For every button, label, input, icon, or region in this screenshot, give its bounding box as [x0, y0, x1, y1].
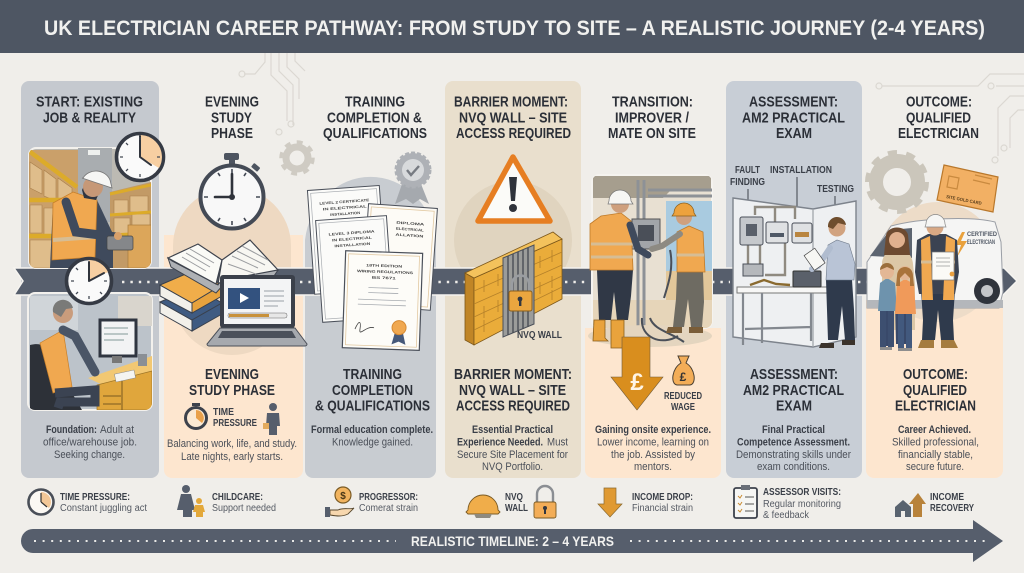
timeline arrow: REALISTIC TIMELINE: 2 – 4 YEARS: [411, 533, 614, 549]
icon: money bag: £: [680, 370, 687, 384]
icon: income down arrow: [611, 337, 663, 410]
callout: income recovery: INCOME: [930, 492, 964, 503]
description: onsite experience: [595, 424, 711, 473]
heading: outcome top: [898, 94, 979, 142]
callout: childcare: CHILDCARE:: [212, 492, 263, 503]
labels: exam tasks: FINDING: [730, 177, 765, 188]
heading: barrier bottom: BARRIER MOMENT:: [454, 366, 572, 383]
heading: barrier bottom: NVQ WALL – SITE: [459, 382, 566, 399]
icon: gold card: [937, 165, 998, 212]
callout: income recovery: RECOVERY: [930, 503, 974, 514]
description: essential experience: [457, 424, 568, 473]
callout: childcare: Support needed: [212, 503, 276, 514]
certificate: level 2: [307, 185, 387, 294]
icon: gold card: SITE GOLD CARD: [946, 194, 983, 206]
icon: time pressure: PRESSURE: [213, 418, 257, 429]
illustration: laptop: [207, 275, 307, 346]
callout: nvq wall: [466, 486, 556, 518]
illustration: van: CERTIFIED: [967, 231, 997, 238]
heading: assessment bottom: [743, 366, 844, 414]
labels: exam tasks: [730, 165, 854, 219]
heading: outcome top: OUTCOME:: [906, 94, 972, 110]
callout: income drop: Financial strain: [632, 503, 693, 514]
callout: nvq wall: WALL: [505, 503, 528, 514]
certificate: 18th edition: WIRING REGULATIONS: [357, 269, 414, 275]
description: essential experience: Must: [547, 436, 568, 448]
callout: income drop: [598, 488, 693, 517]
heading: assessment bottom: EXAM: [776, 398, 812, 414]
central pathway arrow: [14, 267, 1017, 295]
column 2: evening study: [160, 94, 307, 463]
callout: time pressure: Constant juggling act: [60, 503, 147, 514]
title banner: [0, 0, 1024, 53]
description: formal education: Formal education complete.: [311, 424, 433, 436]
callout: childcare: [177, 485, 276, 517]
labels: exam tasks: TESTING: [817, 184, 854, 195]
description: onsite experience: the job. Assisted by: [611, 449, 695, 461]
heading: training bottom: TRAINING: [343, 366, 402, 383]
heading: evening study bottom: EVENING: [205, 366, 259, 383]
heading: barrier top: BARRIER MOMENT:: [454, 94, 568, 110]
heading: assessment top: EXAM: [776, 125, 812, 142]
callout: assessor visits: [734, 485, 841, 521]
heading: training bottom: COMPLETION: [332, 382, 413, 399]
description: essential experience: Secure Site Placement for: [457, 449, 568, 461]
heading: assessment top: ASSESSMENT:: [749, 94, 838, 110]
callout: nvq wall: NVQ: [505, 492, 523, 503]
column 5: transition: [588, 94, 712, 473]
description: foundation: Adult at: [100, 424, 134, 436]
illustration: books: [160, 240, 278, 331]
description: foundation: Foundation:: [46, 424, 97, 436]
timeline arrow: [21, 520, 1003, 562]
certificate: level 2: LEVEL 2 CERTIFICATE: [319, 198, 370, 206]
icon: time pressure: TIME: [213, 407, 234, 418]
description: career achieved: secure future.: [906, 461, 964, 473]
heading: evening study bottom: STUDY PHASE: [189, 382, 275, 399]
icon: time pressure: [186, 403, 280, 435]
illustration: nvq wall: [465, 232, 562, 345]
callout: time pressure: [28, 490, 147, 514]
heading: assessment top: AM2 PRACTICAL: [742, 110, 845, 126]
certificate: level 3 installation: DIPLOMA: [396, 221, 425, 227]
callout: assessor visits: & feedback: [763, 510, 810, 521]
heading: evening study top: [205, 94, 259, 142]
heading: transition: IMPROVER /: [615, 110, 690, 126]
callout: time pressure: TIME PRESSURE:: [60, 492, 130, 503]
description: essential experience: NVQ Portfolio.: [482, 461, 543, 473]
heading: training top: TRAINING: [345, 94, 405, 110]
heading: training bottom: [315, 366, 430, 414]
heading: evening study top: EVENING: [205, 94, 259, 110]
certificate: level 3 diploma: LEVEL 3 DIPLOMA: [328, 229, 375, 237]
description: essential experience: Experience Needed.: [457, 436, 543, 448]
heading: outcome top: QUALIFIED: [906, 110, 971, 126]
heading: evening study top: STUDY: [211, 110, 252, 126]
column 6: assessment: [730, 94, 856, 473]
description: balancing: Late nights, early starts.: [181, 451, 283, 463]
certificate: level 3 diploma: INSTALLATION: [334, 242, 371, 248]
certificate: 18th edition: BS 7671: [372, 276, 396, 280]
description: formal education: [311, 424, 433, 448]
label: reduced wage: WAGE: [671, 402, 695, 413]
icon: large gear: [868, 153, 926, 211]
column 7: outcome: [867, 94, 1003, 473]
column 3: training: [281, 94, 437, 448]
heading: training top: [323, 94, 427, 142]
description: balancing: [167, 438, 297, 463]
heading: training bottom: & QUALIFICATIONS: [315, 398, 430, 414]
icon: clock bottom: [66, 258, 112, 304]
description: foundation: office/warehouse job.: [43, 436, 137, 448]
title banner: UK ELECTRICIAN CAREER PATHWAY: FROM STUDY TO SITE – A REALISTIC JOURNEY (2-4 YEARS): [44, 17, 985, 40]
icon: clock top: [116, 134, 164, 180]
description: career achieved: [892, 424, 979, 473]
callout: progressor: PROGRESSOR:: [359, 492, 418, 503]
icon: money bag: [673, 356, 694, 385]
description: final assessment: Competence Assessment.: [737, 436, 850, 448]
heading: barrier top: ACCESS REQUIRED: [456, 125, 571, 142]
illustration: van: ELECTRICIAN: [967, 240, 995, 246]
heading: barrier top: NVQ WALL – SITE: [459, 110, 567, 126]
heading: barrier bottom: ACCESS REQUIRED: [456, 398, 570, 414]
heading: outcome bottom: ELECTRICIAN: [895, 398, 976, 414]
label: reduced wage: REDUCED: [664, 391, 702, 402]
heading: transition: MATE ON SITE: [608, 125, 696, 142]
heading: evening study top: PHASE: [211, 125, 253, 142]
description: final assessment: [736, 424, 851, 473]
heading: outcome bottom: QUALIFIED: [903, 382, 967, 399]
description: onsite experience: Lower income, learning on: [597, 436, 709, 448]
description: onsite experience: Gaining onsite experience.: [595, 424, 711, 436]
certificate: level 3 installation: ALLATION: [395, 233, 424, 239]
description: career achieved: Career Achieved.: [898, 424, 971, 436]
icon: award badge: [395, 153, 430, 204]
heading: training top: COMPLETION &: [327, 110, 422, 126]
callout: income drop: INCOME DROP:: [632, 492, 693, 503]
heading: outcome bottom: OUTCOME:: [903, 366, 968, 383]
labels: exam tasks: INSTALLATION: [770, 165, 832, 176]
description: final assessment: Demonstrating skills under: [736, 449, 851, 461]
heading: start: START: EXISTING: [36, 94, 143, 110]
illustration: assessment bay: [733, 198, 856, 348]
heading: barrier bottom: [454, 366, 572, 414]
callout: progressor: [325, 487, 418, 517]
heading: transition: [608, 94, 696, 142]
icon: income down arrow: £: [630, 369, 644, 396]
certificate: 18th edition: [342, 251, 423, 350]
certificate: level 2: INSTALLATION: [330, 211, 361, 217]
icon: stopwatch: [200, 153, 264, 228]
heading: training top: QUALIFICATIONS: [323, 125, 427, 142]
certificate: 18th edition: 18TH EDITION: [366, 263, 403, 269]
description: final assessment: Final Practical: [762, 424, 825, 436]
office illustration: [28, 293, 152, 410]
description: career achieved: Skilled professional,: [892, 436, 979, 448]
callout: progressor: Comerat strain: [359, 503, 418, 514]
column 1: start: [28, 94, 164, 461]
heading: transition: TRANSITION:: [612, 94, 693, 110]
certificate: level 3 installation: ELECTRICAL: [396, 227, 425, 233]
callout: assessor visits: Regular monitoring: [763, 499, 841, 510]
label: reduced wage: [664, 391, 702, 413]
callout: progressor: $: [340, 491, 346, 502]
warehouse illustration: [29, 148, 151, 268]
heading: outcome top: ELECTRICIAN: [898, 125, 979, 142]
heading: outcome bottom: [895, 366, 976, 414]
description: formal education: Knowledge gained.: [332, 436, 413, 448]
heading: barrier top: [454, 94, 571, 142]
heading: start: [36, 94, 143, 126]
heading: assessment bottom: ASSESSMENT:: [750, 366, 838, 383]
heading: start: JOB & REALITY: [43, 110, 136, 126]
labels: exam tasks: FAULT: [735, 165, 760, 176]
certificate: level 3 diploma: IN ELECTRICAL: [332, 236, 373, 242]
description: foundation: Seeking change.: [54, 449, 125, 461]
illustration: workers on site: [588, 175, 712, 348]
callout: income recovery: [895, 492, 974, 517]
heading: assessment bottom: AM2 PRACTICAL: [743, 382, 844, 399]
description: foundation: [43, 424, 137, 461]
heading: evening study bottom: [189, 366, 275, 399]
illustration: nvq wall: NVQ WALL: [517, 330, 562, 341]
description: career achieved: financially stable,: [898, 449, 973, 461]
certificate: level 3 installation: [361, 204, 437, 310]
callout row: [28, 485, 974, 521]
illustration: family: [878, 214, 959, 351]
column 4: barrier: [454, 94, 572, 473]
description: final assessment: exam conditions.: [757, 461, 830, 473]
icon: gear: [281, 142, 313, 174]
description: essential experience: Essential Practical: [472, 424, 553, 436]
certificate: level 3 diploma: [316, 216, 394, 322]
illustration: van: [867, 219, 1003, 308]
description: balancing: Balancing work, life, and study.: [167, 438, 297, 450]
heading: assessment top: [742, 94, 845, 142]
description: onsite experience: mentors.: [634, 461, 672, 473]
panel backgrounds: [21, 81, 1003, 478]
icon: warning triangle: [478, 157, 550, 221]
certificate: level 2: IN ELECTRICAL: [323, 204, 368, 211]
callout: assessor visits: ASSESSOR VISITS:: [763, 487, 841, 498]
